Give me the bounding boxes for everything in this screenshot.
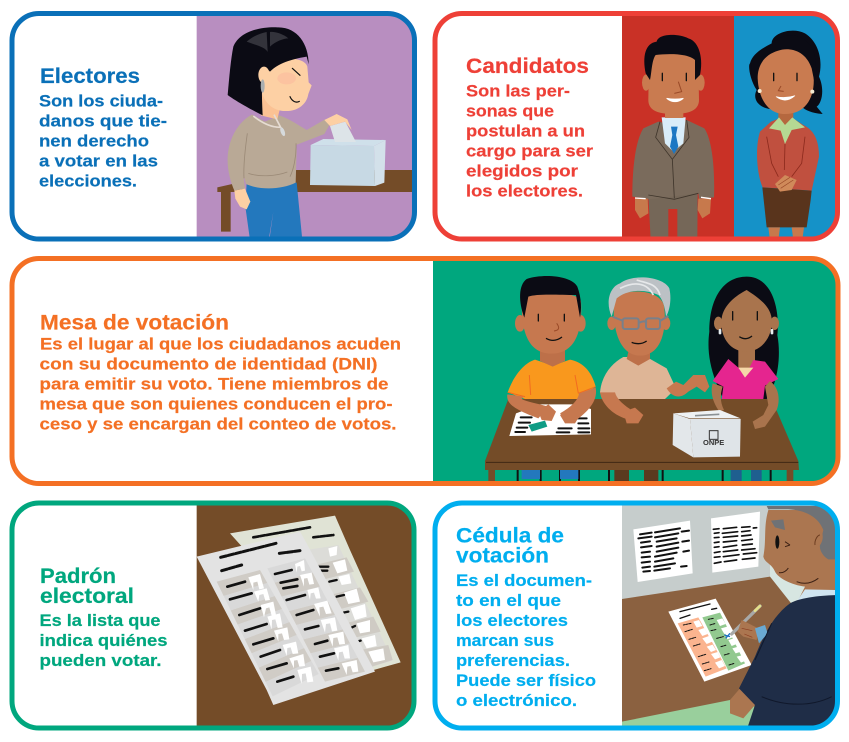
text block: Mesa de votación description: para emitir su voto. Tiene miembros de: [40, 376, 389, 394]
illustration: two candidates: [622, 10, 844, 243]
text block: Candidatos description: los electores.: [466, 182, 583, 200]
text block: Electores description: nen derecho: [39, 132, 149, 150]
young woman torso: [708, 277, 779, 399]
text block: Candidatos description: Son las per-: [466, 82, 570, 100]
text block: Cédula de votación description: marcan sus: [456, 632, 554, 650]
ballot box: [673, 413, 693, 457]
illustration: woman casting a vote: [197, 10, 417, 243]
text block: Candidatos description: cargo para ser: [466, 142, 594, 160]
text block: Padrón electoral description: indica quiénes: [40, 632, 168, 650]
heading: Mesa de votación: Mesa de votación: [40, 312, 229, 334]
heading: Cédula de votación: [456, 524, 564, 568]
illustration: voter roll sheets: [197, 500, 417, 733]
table: [485, 399, 799, 470]
heading: Padrón electoral: electoral: [40, 585, 134, 608]
text block: Mesa de votación description: con su documento de identidad (DNI): [40, 356, 378, 374]
text block: Electores description: danos que tie-: [39, 112, 167, 130]
paper: [509, 404, 591, 436]
arms and hands on the table: [507, 388, 596, 423]
panel: Electores: [12, 10, 417, 243]
illustration: poll workers at a table: [433, 255, 843, 488]
text block: Electores description: Son los ciuda-: [39, 92, 163, 110]
heading: Padrón electoral: [40, 565, 134, 608]
text block: Cédula de votación description: los electores: [456, 612, 568, 630]
text block: Electores description: elecciones.: [39, 172, 137, 190]
text block: Cédula de votación description: preferencias.: [456, 652, 570, 670]
illustration: poll workers at a table: ONPE: [703, 438, 724, 447]
text block: Electores description: [39, 92, 167, 190]
text block: Cédula de votación description: [456, 572, 596, 710]
text block: Cédula de votación description: o electrónico.: [456, 692, 577, 710]
text block: Candidatos description: elegidos por: [466, 162, 579, 180]
text block: Mesa de votación description: ceso y se encargan del conteo de votos.: [40, 416, 396, 434]
heading: Cédula de votación: votación: [456, 544, 549, 568]
panel: Candidatos: [435, 10, 844, 243]
text block: Cédula de votación description: Es el documen-: [456, 572, 592, 590]
text block: Cédula de votación description: Puede ser físico: [456, 672, 596, 690]
old man torso: [600, 357, 676, 399]
text block: Padrón electoral description: Es la lista que: [40, 612, 160, 630]
text block: Electores description: a votar en las: [39, 152, 158, 170]
young man torso: [508, 360, 596, 399]
illustration: man marking a ballot: [622, 500, 842, 733]
panel: Mesa de votación: [12, 255, 843, 488]
heading: Padrón electoral: Padrón: [40, 565, 116, 588]
heading: Candidatos: Candidatos: [466, 55, 589, 78]
text block: Mesa de votación description: [40, 336, 401, 434]
text block: Candidatos description: sonas que: [466, 102, 554, 120]
panel: Cédula de votación: [435, 500, 842, 733]
heading: Cédula de votación: Cédula de: [456, 524, 564, 548]
text block: Mesa de votación description: Es el lugar al que los ciudadanos acuden: [40, 336, 401, 354]
text block: Candidatos description: postulan a un: [466, 122, 585, 140]
text block: Cédula de votación description: to en el que: [456, 592, 561, 610]
text block: Mesa de votación description: mesa que son quienes conducen el pro-: [40, 396, 392, 414]
text block: Padrón electoral description: [40, 612, 168, 670]
heading: Electores: Electores: [40, 65, 140, 88]
text block: Candidatos description: [466, 82, 594, 200]
panel: Padrón electoral: [12, 500, 417, 733]
text block: Padrón electoral description: pueden votar.: [40, 652, 162, 670]
